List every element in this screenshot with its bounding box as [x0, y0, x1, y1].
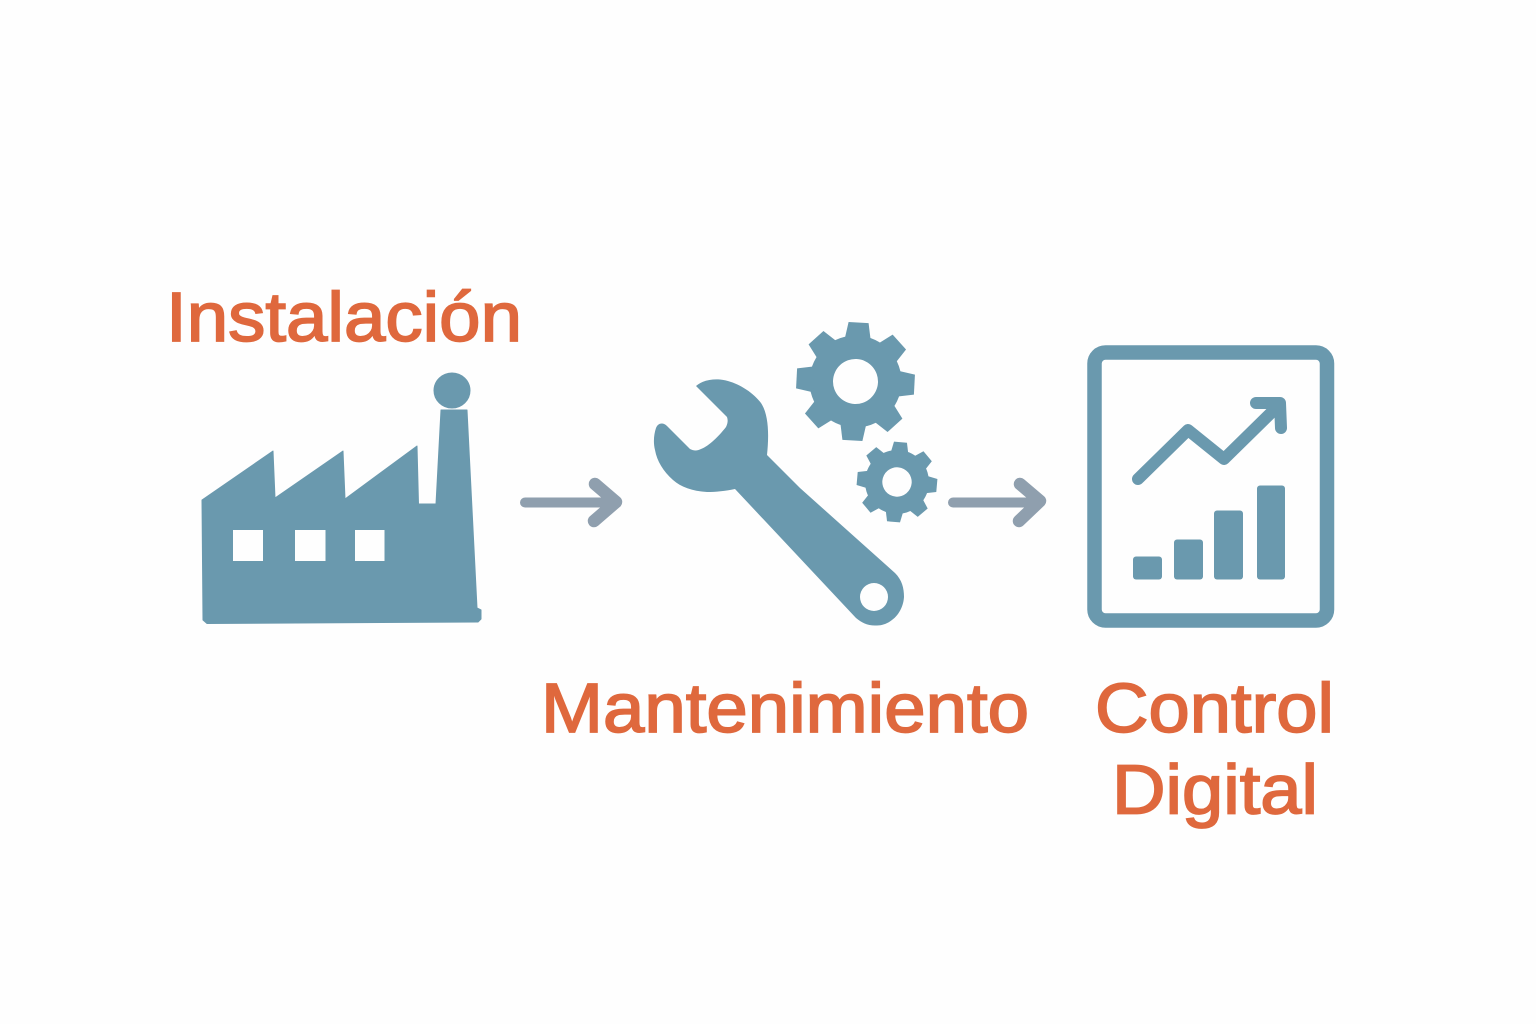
heading: Control Digital: Digital: [1112, 750, 1318, 828]
icon: factory: [202, 373, 481, 624]
heading: Mantenimiento: Mantenimiento: [541, 669, 1029, 747]
icon: bar chart: [1133, 486, 1285, 580]
heading: Control Digital: Control: [1095, 669, 1334, 747]
icon: dashboard frame: [1094, 352, 1327, 620]
icon: wrench: [654, 379, 904, 626]
arrow: installation to maintenance: [525, 484, 616, 521]
heading: Control Digital: [1095, 669, 1334, 828]
arrow: maintenance to digital control: [953, 484, 1040, 521]
icon: large gear: [793, 319, 918, 444]
icon: small gear: [854, 439, 940, 525]
heading: Instalación: Instalación: [166, 278, 522, 356]
icon: trend line arrow: [1138, 403, 1281, 479]
